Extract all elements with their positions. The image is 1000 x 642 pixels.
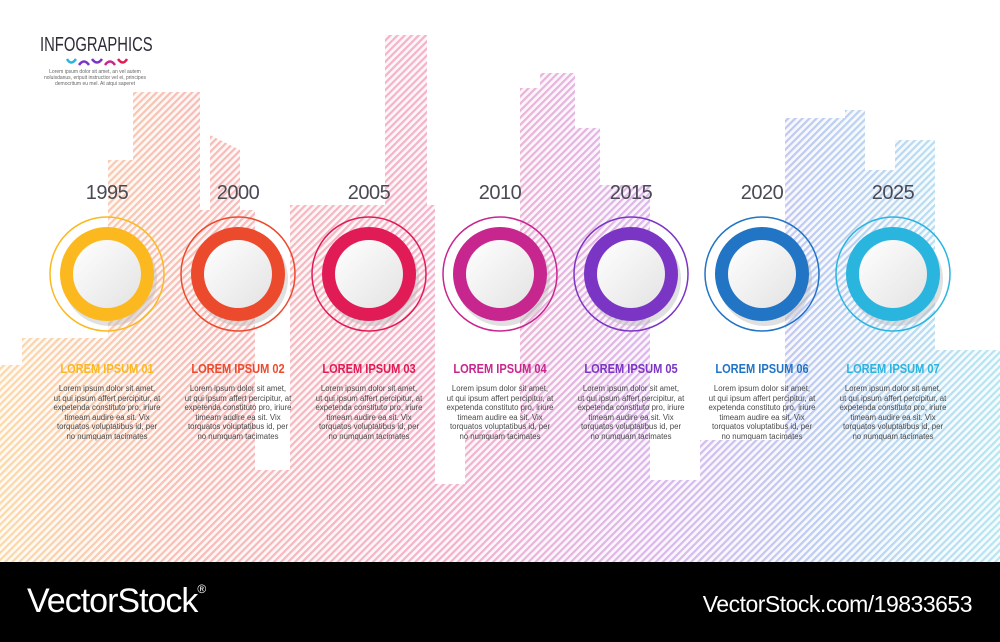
text 06: ut qui ipsum affert percipitur, at	[709, 394, 815, 403]
title 07: LOREM IPSUM 07	[846, 361, 940, 376]
text 02: torquatos voluptatibus id, per	[188, 422, 288, 431]
text 06	[708, 384, 816, 441]
text 02	[184, 384, 292, 441]
text 05	[577, 384, 685, 441]
text 07: timeam audire ea sit. Vix	[850, 413, 936, 422]
year 1995: 1995	[86, 182, 128, 204]
text 01	[53, 384, 161, 441]
text 03: ut qui ipsum affert percipitur, at	[316, 394, 422, 403]
title 05: LOREM IPSUM 05	[584, 361, 678, 376]
text 03	[315, 384, 423, 441]
text 07: expetenda constituto pro, iriure	[839, 403, 947, 412]
text 04	[446, 384, 554, 441]
text 03: timeam audire ea sit. Vix	[326, 413, 412, 422]
icon: wave	[66, 58, 128, 66]
circle 2025	[836, 217, 950, 331]
text 04: torquatos voluptatibus id, per	[450, 422, 550, 431]
text 06: timeam audire ea sit. Vix	[719, 413, 805, 422]
text 01: expetenda constituto pro, iriure	[53, 403, 161, 412]
title 06: LOREM IPSUM 06	[715, 361, 809, 376]
year 2010: 2010	[479, 182, 521, 204]
text 01: torquatos voluptatibus id, per	[57, 422, 157, 431]
text 05: no numquam tacimates	[590, 432, 672, 441]
text 02: ut qui ipsum affert percipitur, at	[185, 394, 291, 403]
text 02: expetenda constituto pro, iriure	[184, 403, 292, 412]
text 05: torquatos voluptatibus id, per	[581, 422, 681, 431]
circle 1995	[50, 217, 164, 331]
title 01: LOREM IPSUM 01	[60, 361, 154, 376]
footer logo: VectorStock®	[27, 582, 205, 620]
text 01: no numquam tacimates	[66, 432, 148, 441]
text 04: no numquam tacimates	[459, 432, 541, 441]
text 05: ut qui ipsum affert percipitur, at	[578, 394, 684, 403]
title 02: LOREM IPSUM 02	[191, 361, 285, 376]
text 05: Lorem ipsum dolor sit amet,	[583, 384, 679, 393]
text 04: ut qui ipsum affert percipitur, at	[447, 394, 553, 403]
year 2020: 2020	[741, 182, 783, 204]
year 2000: 2000	[217, 182, 259, 204]
title block: Lorem ipsum dolor sit amet, an vel autem noluisdanus, eripuit instructior vel ei, principes democritum eu mel. At atqui saperet	[44, 69, 146, 87]
title block: INFOGRAPHICS	[40, 34, 153, 56]
year 2025: 2025	[872, 182, 914, 204]
title block	[40, 34, 153, 87]
text 07	[839, 384, 947, 441]
text 04: expetenda constituto pro, iriure	[446, 403, 554, 412]
circle 2010	[443, 217, 557, 331]
year 2015: 2015	[610, 182, 652, 204]
circle 2020	[705, 217, 819, 331]
text 04: Lorem ipsum dolor sit amet,	[452, 384, 548, 393]
text 02: no numquam tacimates	[197, 432, 279, 441]
text 04: timeam audire ea sit. Vix	[457, 413, 543, 422]
text 03: no numquam tacimates	[328, 432, 410, 441]
text 06: torquatos voluptatibus id, per	[712, 422, 812, 431]
text 07: no numquam tacimates	[852, 432, 934, 441]
text 07: ut qui ipsum affert percipitur, at	[840, 394, 946, 403]
text 07: torquatos voluptatibus id, per	[843, 422, 943, 431]
text 02: Lorem ipsum dolor sit amet,	[190, 384, 286, 393]
footer bar	[0, 562, 1000, 642]
text 05: expetenda constituto pro, iriure	[577, 403, 685, 412]
text 06: no numquam tacimates	[721, 432, 803, 441]
text 03: torquatos voluptatibus id, per	[319, 422, 419, 431]
circle 2015	[574, 217, 688, 331]
text 03: Lorem ipsum dolor sit amet,	[321, 384, 417, 393]
text 01: ut qui ipsum affert percipitur, at	[54, 394, 160, 403]
text 06: Lorem ipsum dolor sit amet,	[714, 384, 810, 393]
text 03: expetenda constituto pro, iriure	[315, 403, 423, 412]
year 2005: 2005	[348, 182, 390, 204]
title 03: LOREM IPSUM 03	[322, 361, 416, 376]
text 05: timeam audire ea sit. Vix	[588, 413, 674, 422]
text 01: Lorem ipsum dolor sit amet,	[59, 384, 155, 393]
circle 2000	[181, 217, 295, 331]
title 04: LOREM IPSUM 04	[453, 361, 547, 376]
text 07: Lorem ipsum dolor sit amet,	[845, 384, 941, 393]
text 06: expetenda constituto pro, iriure	[708, 403, 816, 412]
footer url: VectorStock.com/19833653	[703, 591, 972, 617]
circle 2005	[312, 217, 426, 331]
text 01: timeam audire ea sit. Vix	[64, 413, 150, 422]
text 02: timeam audire ea sit. Vix	[195, 413, 281, 422]
